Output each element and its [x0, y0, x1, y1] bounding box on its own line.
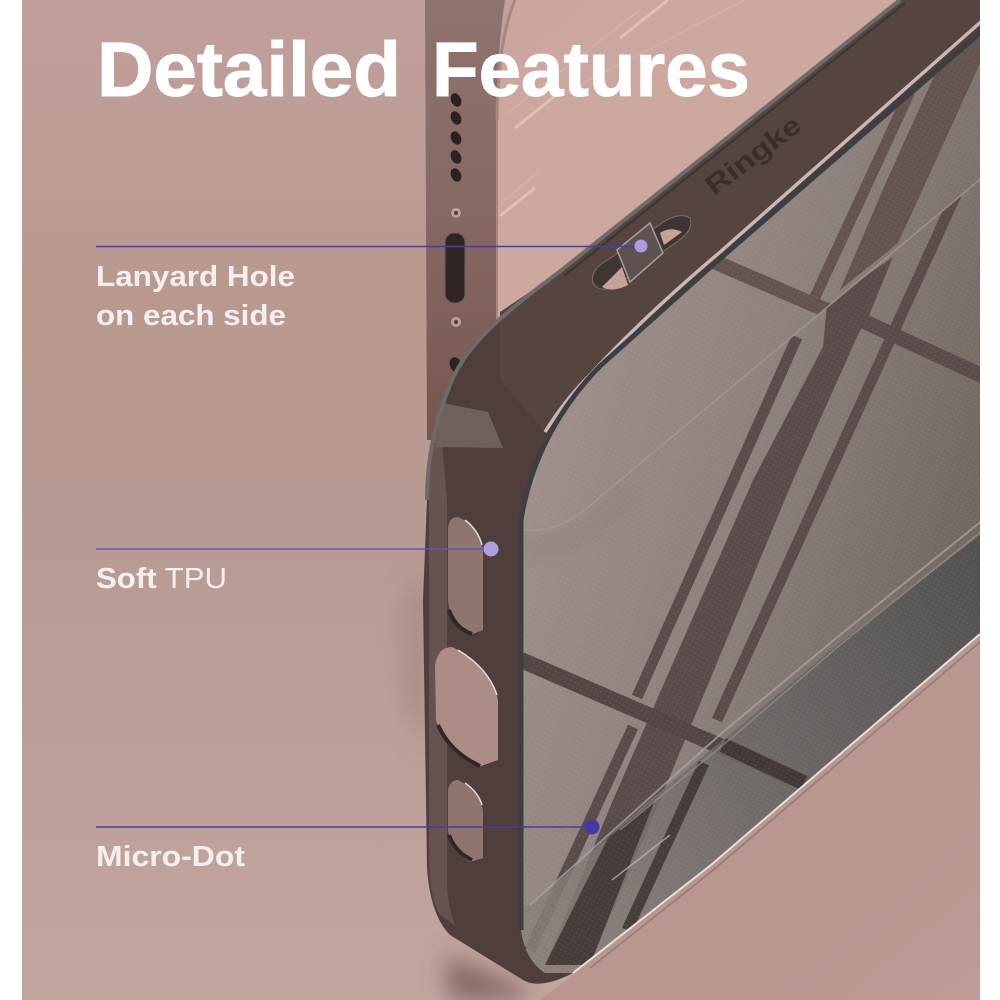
light reflection region — [515, 533, 983, 985]
icon: charging port — [445, 233, 465, 303]
phone body seen through top — [425, 0, 905, 440]
callout: soft TPU: Soft TPU — [96, 563, 227, 595]
phone case silhouette — [423, 0, 983, 984]
icon: speaker holes — [447, 92, 465, 375]
callout: lanyard hole: Lanyard Hole — [96, 261, 295, 293]
callout: lanyard hole: on each side — [96, 300, 286, 332]
stripes above fold — [712, 37, 980, 314]
side cut-outs — [435, 517, 498, 862]
callout: soft TPU — [96, 542, 498, 595]
icon: screws — [451, 208, 461, 327]
title — [97, 27, 750, 113]
shadow under case — [405, 570, 530, 1000]
title: Detailed — [97, 27, 401, 113]
shadow and fold lines — [521, 482, 640, 565]
stripes below fold — [521, 175, 985, 965]
callout: micro-dot: Micro-Dot — [96, 841, 245, 873]
case edge highlights — [521, 20, 983, 973]
brand text on case side: Ringke — [700, 109, 807, 201]
title: Features — [432, 27, 750, 113]
callout: micro-dot — [96, 820, 600, 873]
lanyard hole — [593, 216, 691, 290]
callout: lanyard hole — [96, 240, 648, 332]
back face with cross stripes — [521, 36, 980, 973]
